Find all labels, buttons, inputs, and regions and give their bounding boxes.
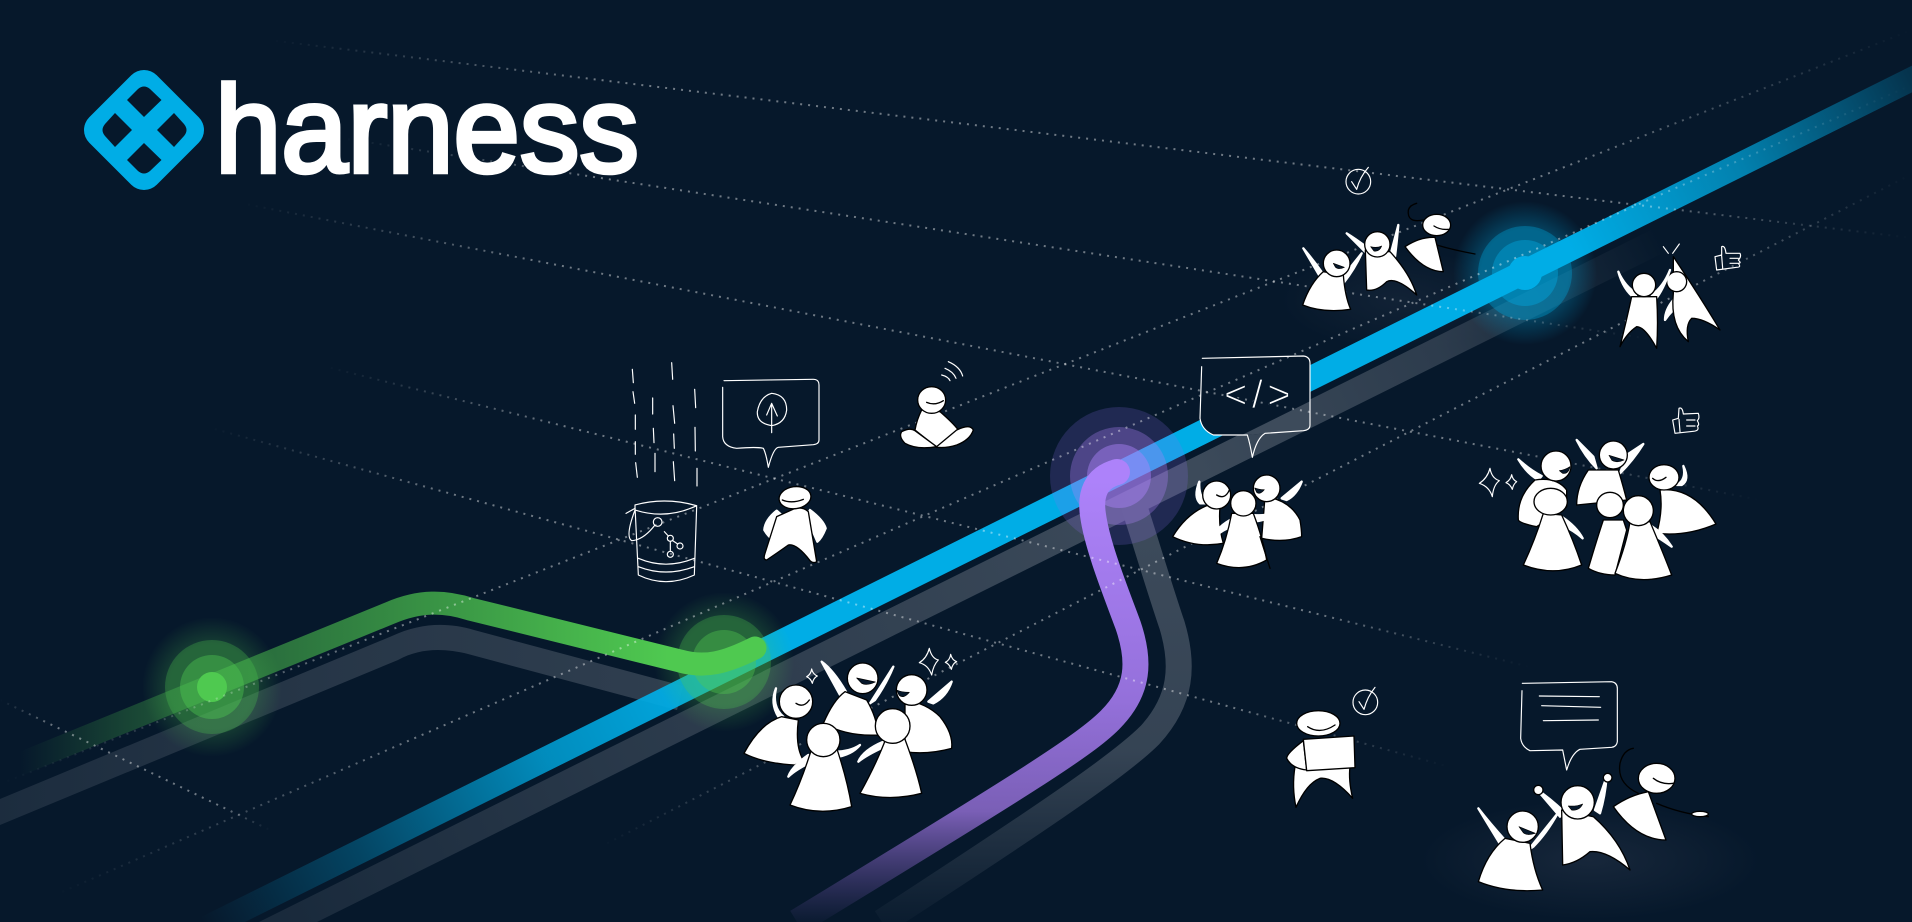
shadow track: green branch (0, 625, 683, 825)
person right (1405, 203, 1475, 272)
person front left (788, 723, 860, 811)
purple node glow (1050, 407, 1188, 545)
person centre (1534, 773, 1630, 870)
check mark icon (1353, 687, 1378, 715)
thumbs up icon (1715, 246, 1741, 270)
person back centre (1577, 440, 1643, 505)
code symbol: </> (1224, 373, 1291, 417)
shadow track: main (259, 226, 1660, 922)
speech bubble with text lines (1521, 682, 1617, 770)
speech bubble with code (1200, 356, 1310, 457)
rain dashes (632, 363, 697, 486)
logo (102, 62, 639, 199)
check mark icon (1346, 167, 1371, 194)
green node glow 1 (142, 617, 282, 757)
person left (1173, 481, 1231, 545)
floor glow (1420, 800, 1760, 920)
person with laptop (1287, 711, 1355, 807)
person middle (1347, 225, 1417, 295)
person front (1214, 491, 1276, 568)
code bubble backdrop (1200, 366, 1310, 435)
green node glow 2 (654, 592, 794, 732)
meditating person (901, 362, 973, 448)
purple track (797, 459, 1135, 922)
illustration: group of five with sparkles (744, 648, 957, 811)
illustration: celebrating trio and high five (1303, 167, 1741, 348)
person left (744, 685, 813, 765)
person front left (1523, 488, 1583, 571)
standing person (764, 485, 826, 563)
speech bubble with upload arrow (723, 379, 819, 467)
person back right (1649, 465, 1716, 534)
person front right (858, 709, 922, 797)
blue node glow (1453, 201, 1597, 345)
person back left (1518, 451, 1571, 527)
person back centre (822, 662, 893, 735)
thumbs up icon (1673, 408, 1699, 433)
bucket icon (626, 501, 697, 582)
person left (1303, 248, 1362, 311)
sparkles (807, 648, 957, 683)
person front right (1615, 496, 1672, 580)
logo wordmark: harness (215, 62, 639, 199)
high five pair (1618, 244, 1720, 348)
logo mark (102, 86, 186, 174)
illustration: code bubble with group of three (1173, 356, 1310, 568)
green track (10, 603, 755, 768)
illustration: laptop person and trio with message (1287, 682, 1708, 891)
person left (1478, 808, 1558, 891)
illustration: bucket, rain, speech bubble and meditating person (626, 362, 973, 582)
person right (1253, 475, 1302, 540)
shadow track: purple branch (882, 500, 1179, 922)
person front centre (1588, 492, 1627, 575)
person right (896, 675, 952, 753)
person right (1613, 748, 1708, 840)
illustration: group of five with thumbs up (1479, 408, 1716, 580)
sparkles (1479, 468, 1517, 497)
floor glow upper group (1280, 250, 1520, 350)
